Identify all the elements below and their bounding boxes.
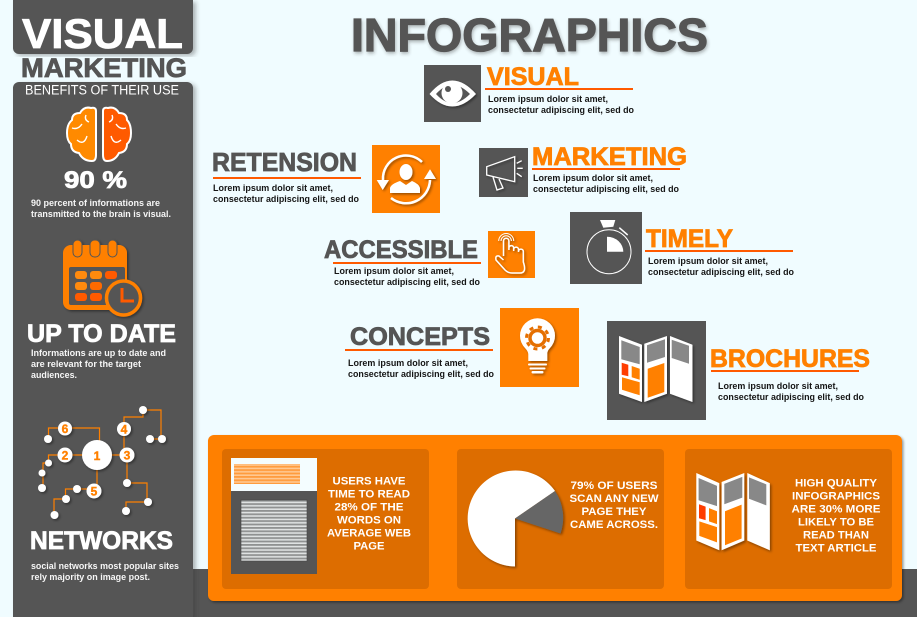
heading: TIMELY [646,225,733,253]
icon: hand pointer [488,231,535,278]
item: accessible [324,231,535,288]
text: consectetur adipiscing elit, sed do [213,194,359,205]
text: Lorem ipsum dolor sit amet, [213,183,333,194]
text [792,478,880,554]
icon: calendar with clock [63,240,140,315]
chart: pie [468,471,563,566]
heading: CONCEPTS [350,323,490,351]
text: PAGE THEY [582,506,646,518]
icon: light bulb with gear [500,308,579,387]
heading: marketing: MARKETING [21,53,187,83]
bottom band [193,569,917,617]
icon: web page [231,458,317,574]
icon: brochure [607,321,706,420]
text: AVERAGE WEB [327,528,411,540]
text: consectetur adipiscing elit, sed do [533,184,679,195]
icon: megaphone [479,148,528,197]
chart: network diagram [38,406,166,519]
text: SCAN ANY NEW [570,493,658,505]
text: networks description: rely majority on image post. [31,572,150,583]
text: HIGH QUALITY [795,478,877,490]
text: CAME ACROSS. [570,519,658,531]
heading: VISUAL [487,63,579,91]
text: up to date description: Informations are up to date and [31,348,166,359]
item: concepts [345,308,579,387]
text: Lorem ipsum dolor sit amet, [648,256,768,267]
text: 28% OF THE [334,502,404,514]
item: visual [424,63,634,122]
text: consectetur adipiscing elit, sed do [488,105,634,116]
text: INFOGRAPHICS [792,490,880,502]
heading: visual: VISUAL [22,10,183,57]
panel: sidebar [13,0,193,617]
text: consectetur adipiscing elit, sed do [718,392,864,403]
card: scanning [457,449,664,589]
text [533,173,679,195]
text [213,183,359,205]
text: Lorem ipsum dolor sit amet, [348,358,468,369]
heading: BROCHURES [710,345,870,373]
text: networks description [31,561,179,583]
text: PAGE [354,540,384,552]
sidebar title block [13,0,193,54]
text: up to date description [31,348,166,381]
text [348,358,494,380]
text [648,256,794,278]
heading: up to date: UP TO DATE [27,320,176,348]
card: infographics quality [685,449,892,589]
icon: brochure [696,473,770,550]
subheading: benefits: BENEFITS OF THEIR USE [25,82,179,98]
panel: statistics [208,435,902,601]
heading: ACCESSIBLE [324,236,478,264]
chart: network diagram: 3 [124,448,131,462]
text: networks description: social networks most popular sites [31,561,179,572]
stat: 90 percent: 90 % [64,167,127,194]
chart: network diagram: 2 [62,448,69,462]
text: ARE 30% MORE [792,504,880,516]
text: Lorem ipsum dolor sit amet, [488,94,608,105]
text [334,266,480,288]
text: Lorem ipsum dolor sit amet, [334,266,454,277]
text: Lorem ipsum dolor sit amet, [718,381,838,392]
text [570,480,658,531]
icon: user cycle [372,145,440,213]
title: INFOGRAPHICS [351,9,708,61]
text [327,476,411,552]
text: TIME TO READ [328,488,410,500]
sidebar background [13,82,193,617]
text: USERS HAVE [332,476,406,488]
chart: network diagram: 5 [91,484,98,498]
panel background [208,435,902,601]
item: timely [570,212,794,284]
text: WORDS ON [337,514,401,526]
text: consectetur adipiscing elit, sed do [648,267,794,278]
heading: RETENSION [212,147,357,177]
chart: network diagram: 4 [121,422,128,436]
text: LIKELY TO BE [798,516,874,528]
icon: brain [67,108,131,161]
card: reading time [222,449,429,589]
text: brain description [31,198,171,220]
text: READ THAN [803,530,869,542]
text [488,94,634,116]
text: Lorem ipsum dolor sit amet, [533,173,653,184]
text [718,381,864,403]
text: brain description: transmitted to the brain is visual. [31,209,171,220]
chart: network diagram: 1 [94,449,101,463]
text: 79% OF USERS [570,480,658,492]
text: TEXT ARTICLE [796,542,876,554]
item: marketing [479,143,687,197]
text: up to date description: audiences. [31,370,77,381]
heading: MARKETING [532,143,687,171]
text: consectetur adipiscing elit, sed do [334,277,480,288]
icon: eye [424,65,481,122]
text: brain description: 90 percent of informations are [31,198,160,209]
item: brochures [607,321,870,420]
chart: network diagram: 6 [62,422,69,436]
heading: networks: NETWORKS [30,527,173,555]
icon: stopwatch [570,212,642,284]
text: up to date description: are relevant for the target [31,359,142,370]
text: consectetur adipiscing elit, sed do [348,369,494,380]
item: retension [212,145,440,213]
